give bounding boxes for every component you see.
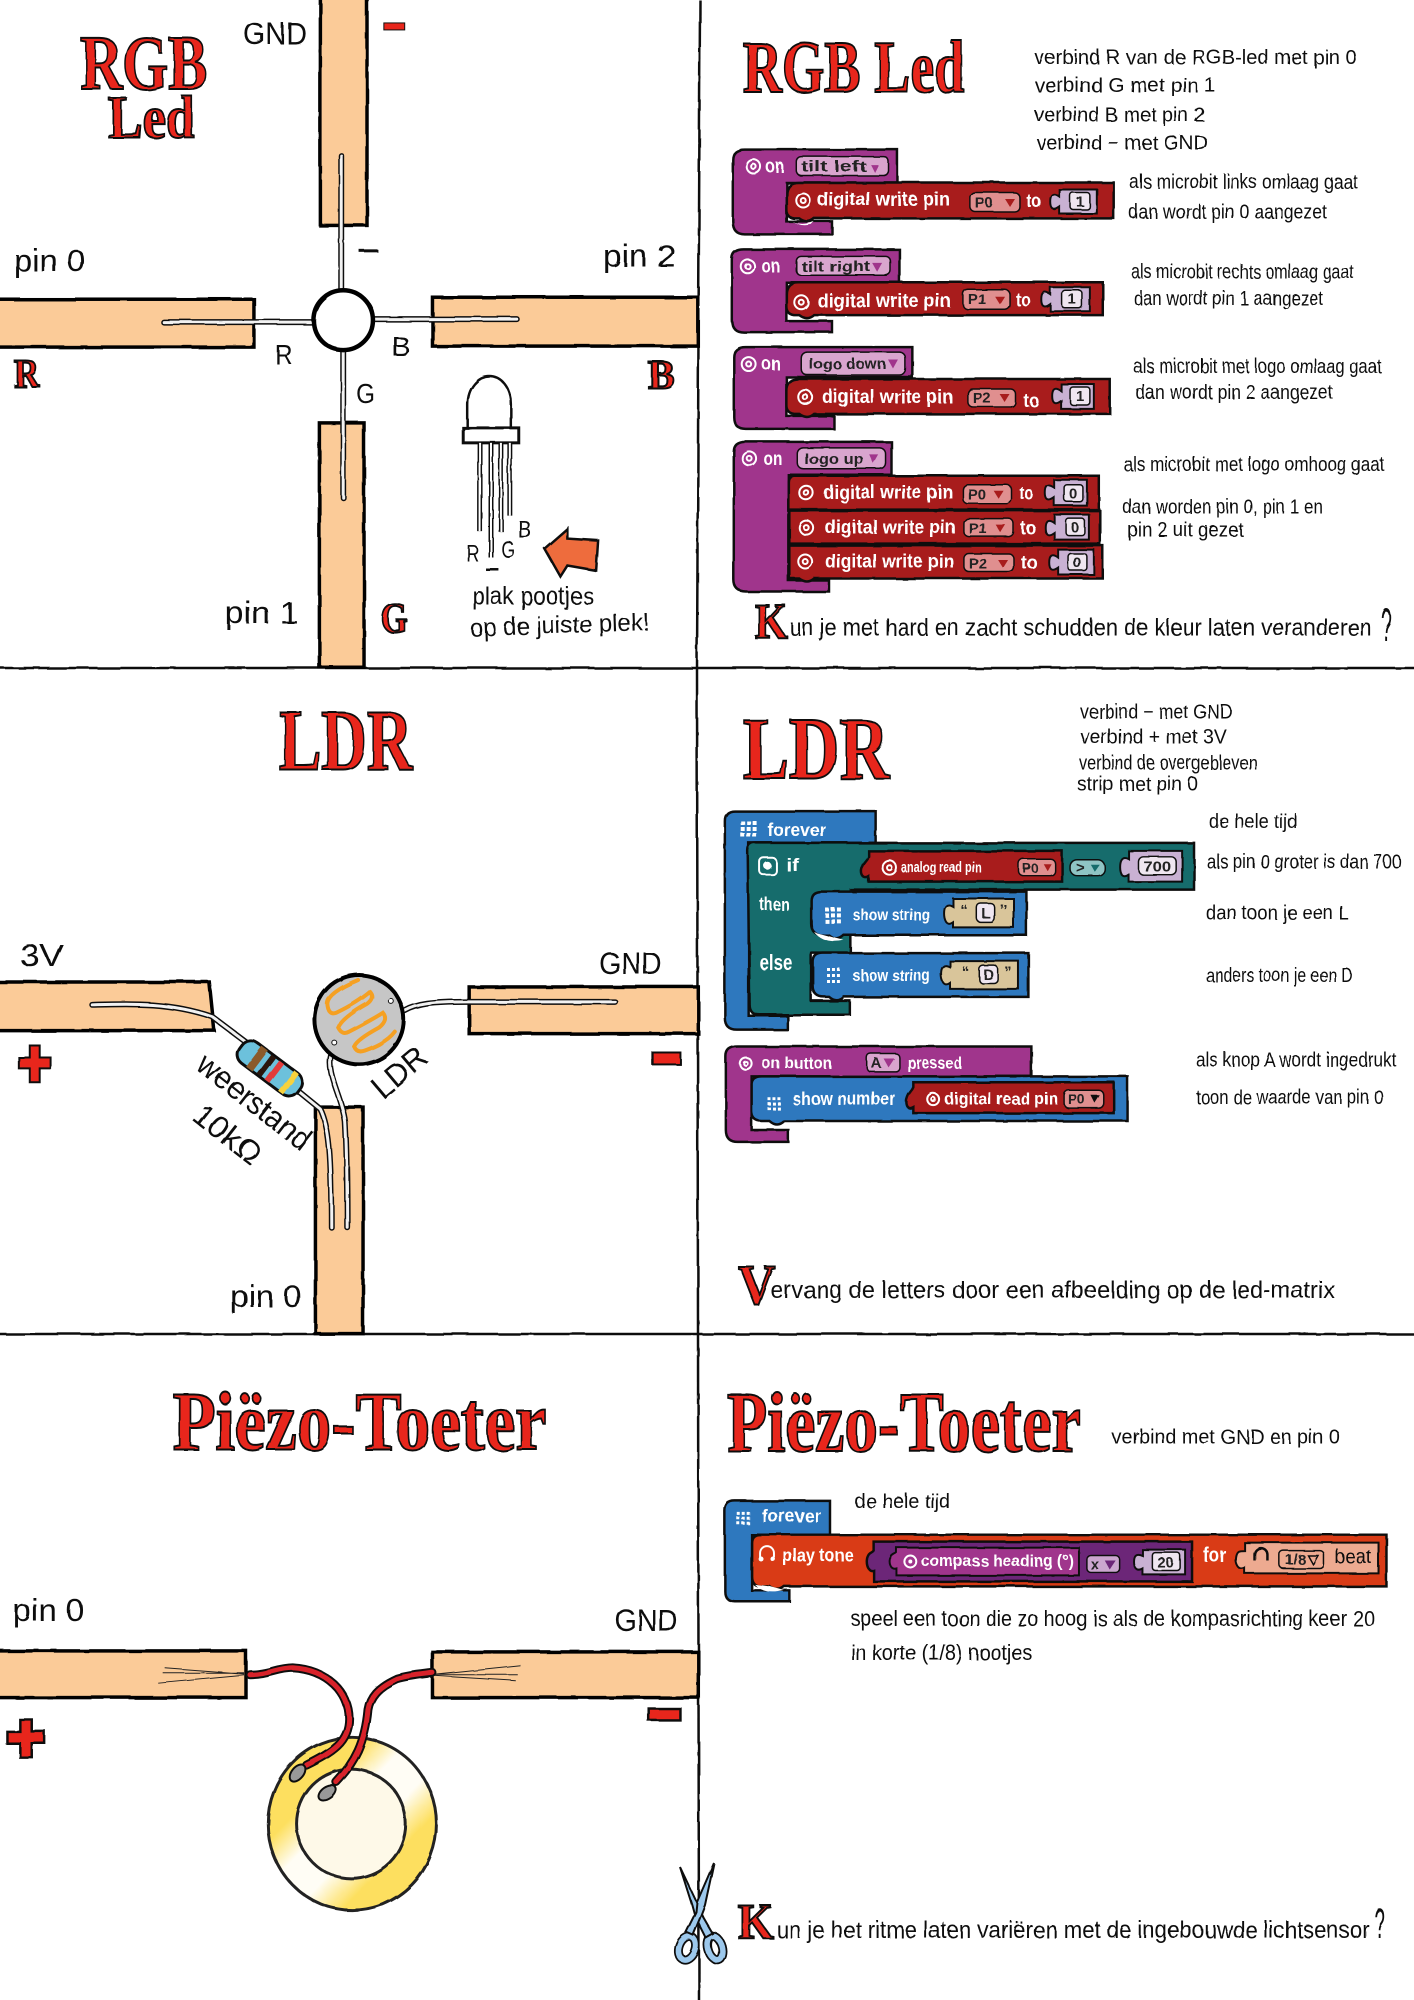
code block: tilt right: 1 (1068, 292, 1076, 308)
code notes: forever: de hele tijd (1209, 811, 1297, 833)
code block: tilt right: digital write pin (817, 291, 951, 312)
code block: forever if else: D (983, 967, 994, 983)
code note: logo up (1123, 454, 1385, 542)
code block: forever if else: “ (960, 902, 967, 918)
code block: tilt left: 1 (1076, 194, 1084, 210)
panel: RGB Led wiring (0, 0, 698, 667)
component labels: LDR (364, 1038, 434, 1106)
strip labels: GND (243, 15, 306, 51)
code block: tilt left: on (766, 157, 784, 178)
code block: tilt left (733, 150, 1114, 234)
wires (92, 1002, 615, 1227)
code block: forever if else (725, 811, 1194, 1030)
title: LDR: LDR (279, 691, 413, 788)
panel: Piezo code (725, 1376, 1386, 1949)
title: Piëzo-Toeter (173, 1376, 547, 1468)
code block: logo up: on (764, 449, 782, 470)
code block: forever play tone: compass heading (°) (921, 1551, 1074, 1570)
strip labels: 3V (20, 937, 64, 973)
code block: forever play tone: x (1091, 1557, 1100, 1573)
led wires and head (164, 156, 517, 498)
strip labels: B (648, 353, 674, 397)
strip labels: R (14, 352, 41, 396)
icon: rgb led component: B (518, 517, 532, 544)
code block: logo up: 0 (1073, 555, 1081, 572)
icon: piezo disc (268, 1737, 436, 1910)
code block: forever if else: P0 (1022, 861, 1038, 876)
code block: forever play tone: for (1203, 1544, 1226, 1567)
wiring instructions (1034, 47, 1357, 155)
code note: logo up: pin 2 uit gezet (1128, 520, 1244, 542)
code note: logo down (1134, 356, 1382, 404)
code block: logo down: on (762, 354, 780, 375)
code note: tilt left: als microbit links omlaag gaat (1130, 171, 1358, 194)
title: LDR (743, 699, 891, 798)
component labels (186, 1038, 434, 1172)
code block: forever play tone (725, 1501, 1386, 1601)
code block: on button A: on button (762, 1053, 832, 1072)
code block: logo up: to (1019, 484, 1033, 505)
code block: forever if else: 700 (1143, 860, 1171, 876)
code note: tilt left (1129, 171, 1358, 223)
code block: on button A: pressed (907, 1053, 962, 1072)
code block: logo up: digital write pin (825, 551, 954, 573)
code block: tilt left: to (1026, 191, 1041, 212)
note: plak pootjes (469, 582, 650, 642)
panel: Piezo wiring (0, 1376, 698, 1910)
code block: logo up: 0 (1071, 521, 1079, 537)
strip labels: pin 1 (225, 594, 299, 630)
code block: tilt right: tilt right (801, 259, 871, 275)
code block: tilt right: to (1015, 290, 1030, 311)
challenge question: K (738, 1894, 774, 1949)
wiring instructions: verbind de overgebleven (1079, 752, 1258, 774)
code block: logo up: P1 (969, 522, 987, 538)
code block: logo up: logo up (804, 452, 864, 468)
strip labels: B (392, 331, 411, 362)
code block: logo down: digital write pin (822, 387, 953, 408)
title: RGB Led (80, 20, 207, 151)
challenge question (755, 593, 1392, 651)
code block: forever if else: else (760, 950, 792, 975)
code block: logo down: to (1023, 391, 1039, 412)
code block: tilt left: tilt left (801, 160, 867, 176)
strip labels: pin 0 (13, 1592, 84, 1628)
wiring instruction: verbind met GND en pin 0 (1112, 1426, 1340, 1448)
code explanation: speel een toon die zo hoog is als de kompasrichting keer 20 (851, 1606, 1375, 1631)
strip labels: pin 0 (14, 242, 85, 278)
code block: tilt left: P0 (975, 195, 993, 211)
challenge question (738, 1894, 1385, 1949)
code block: forever if else: show string (853, 905, 930, 924)
code note: tilt right (1132, 261, 1354, 310)
panel: RGB Led code (732, 26, 1392, 651)
icon: LDR sensor (314, 975, 404, 1064)
panel: LDR wiring (0, 691, 698, 1334)
code block: forever play tone: forever (762, 1505, 822, 1526)
code block: logo up: to (1020, 519, 1036, 540)
code block: on button A: show number (792, 1088, 896, 1109)
title: RGB Led: Led (108, 84, 194, 151)
title: RGB Led (743, 26, 965, 108)
code explanation: in korte (1/8) nootjes (851, 1640, 1032, 1665)
wiring instructions: verbind R van de RGB-led met pin 0 (1034, 47, 1357, 69)
code block: forever if else: if (786, 855, 800, 876)
code notes: forever: anders toon je een D (1206, 965, 1353, 987)
strip labels: R (275, 339, 293, 370)
title: Piëzo-Toeter (727, 1376, 1081, 1470)
code notes: button: toon de waarde van pin 0 (1196, 1087, 1383, 1109)
challenge question: K (755, 593, 788, 648)
wiring instructions: strip met pin 0 (1077, 773, 1198, 795)
component labels: 10kΩ (186, 1096, 269, 1172)
code block: logo down (734, 347, 1110, 429)
code block: tilt left: digital write pin (817, 189, 950, 210)
icon: scissors (675, 1863, 725, 1962)
icon: rgb led component: G (501, 536, 515, 564)
challenge question: V (738, 1254, 775, 1317)
code block: forever if else: L (982, 906, 991, 922)
code block: forever if else: “ (962, 965, 969, 981)
challenge question: un je het ritme laten variëren met de ingebouwde lichtsensor (776, 1917, 1370, 1944)
copper strips (0, 1651, 698, 1698)
copper strips (0, 0, 698, 667)
code block: logo up (734, 442, 1103, 591)
code block: on button A: P0 (1068, 1091, 1085, 1107)
code block: forever if else: show string (853, 966, 930, 985)
strip labels: pin 0 (230, 1278, 302, 1314)
code block: on button A: A (871, 1055, 882, 1071)
strip labels: pin 2 (603, 237, 675, 273)
code block: logo down: logo down (809, 357, 887, 373)
strip labels (19, 937, 680, 1314)
code block: forever if else: ” (1005, 965, 1012, 981)
wiring instructions: verbind G met pin 1 (1034, 75, 1216, 97)
panel: Piezo code: ? (1375, 1900, 1385, 1947)
note: plak pootjes: plak pootjes (472, 582, 594, 610)
code block: logo up: 0 (1069, 487, 1077, 503)
code block: logo down: 1 (1076, 389, 1084, 405)
code block: logo up: P2 (969, 556, 987, 573)
code block: logo up: to (1020, 552, 1037, 574)
wiring instructions (1077, 702, 1258, 795)
icon: rgb led component: R (466, 540, 479, 568)
code block: forever if else: analog read pin (901, 861, 982, 877)
icon: resistor (233, 1036, 307, 1101)
code block: tilt right: P1 (968, 292, 986, 308)
piezo wires (158, 1666, 521, 1804)
challenge question: ervang de letters door een afbeelding op de led-matrix (770, 1277, 1335, 1304)
code block: forever play tone: 20 (1157, 1555, 1174, 1571)
code block: forever if else: > (1076, 861, 1085, 877)
code note: tilt right: als microbit rechts omlaag gaat (1132, 261, 1354, 283)
icon: rgb led component (463, 376, 532, 571)
note: plak pootjes: op de juiste plek! (469, 608, 650, 642)
wiring instructions: verbind + met 3V (1080, 727, 1227, 749)
title: RGB Led: RGB (80, 20, 207, 106)
code block: logo up: digital write pin (823, 483, 953, 504)
copper strips (0, 982, 698, 1334)
code note: tilt left: dan wordt pin 0 aangezet (1129, 201, 1327, 223)
code block: on button A: digital read pin (944, 1089, 1058, 1108)
code note: logo down: dan wordt pin 2 aangezet (1136, 382, 1333, 404)
panel: LDR code (725, 699, 1401, 1317)
code block: logo up: digital write pin (825, 518, 956, 539)
code block: on button A (726, 1047, 1128, 1142)
code block: logo up: P0 (968, 488, 986, 504)
code notes: forever (1206, 811, 1401, 987)
strip labels (14, 15, 675, 642)
code note: de hele tijd: de hele tijd (855, 1491, 950, 1513)
code block: forever play tone: play tone (782, 1544, 854, 1566)
strip labels: G (356, 378, 375, 409)
wiring instructions: verbind − met GND (1080, 702, 1233, 724)
code block: forever if else: then (760, 893, 789, 914)
wiring instructions: verbind B met pin 2 (1034, 105, 1205, 127)
strip labels: GND (615, 1602, 677, 1638)
code block: forever play tone: beat (1335, 1546, 1372, 1568)
component labels: weerstand (189, 1045, 319, 1157)
code block: forever play tone: 1/8 (1285, 1552, 1306, 1568)
code block: tilt right: on (762, 256, 780, 277)
arrow (545, 529, 598, 576)
code notes: button (1196, 1049, 1397, 1109)
challenge question (738, 1254, 1335, 1317)
infographic page: ? (1381, 600, 1392, 651)
code block: forever if else: forever (768, 819, 827, 840)
code block: logo down: P2 (973, 391, 991, 407)
strip labels: G (381, 596, 408, 642)
code notes: forever: dan toon je een L (1206, 902, 1349, 924)
strip labels (7, 1592, 680, 1757)
strip labels: GND (599, 945, 662, 981)
code block: forever if else: ” (1000, 902, 1007, 918)
wiring instructions: verbind − met GND (1036, 133, 1208, 155)
code block: tilt right (732, 249, 1103, 332)
code note: tilt right: dan wordt pin 1 aangezet (1134, 288, 1323, 310)
code note: logo up: dan worden pin 0, pin 1 en (1123, 497, 1323, 519)
challenge question: un je met hard en zacht schudden de kleur laten veranderen (789, 614, 1372, 641)
code explanation (851, 1606, 1375, 1665)
